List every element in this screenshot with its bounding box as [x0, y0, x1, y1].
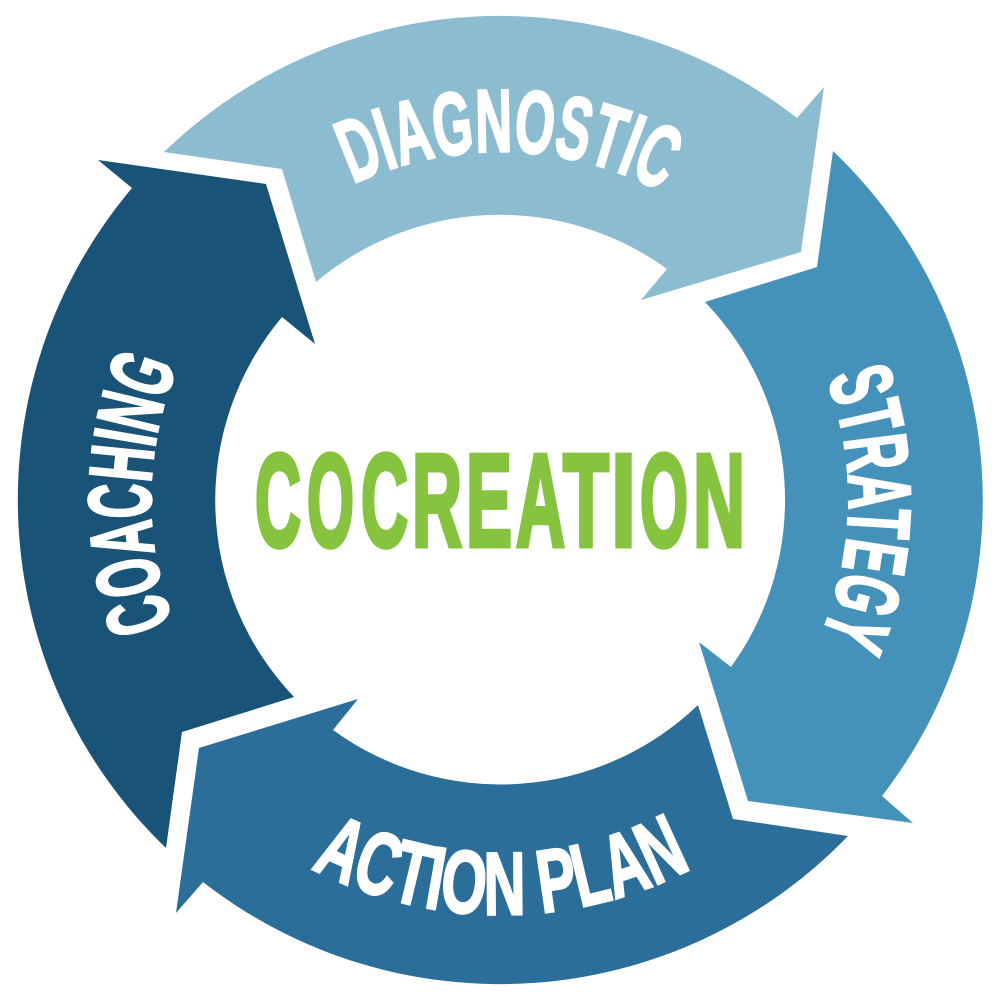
arrow: action plan: ACTION PLAN — [310, 813, 690, 916]
center title: O — [640, 427, 688, 574]
arrow: coaching — [18, 160, 315, 848]
arrow: diagnostic: DIAGNOSTIC — [332, 88, 682, 187]
center title: C — [255, 427, 301, 574]
center title: O — [307, 427, 354, 574]
center title: E — [466, 427, 512, 574]
center title: N — [693, 427, 745, 574]
center title — [255, 427, 745, 574]
center title: C — [361, 427, 408, 574]
center title: I — [611, 427, 636, 574]
arrow: action plan — [176, 699, 848, 984]
arrow: diagnostic — [164, 16, 824, 300]
center title: R — [412, 427, 462, 574]
center title: A — [516, 427, 565, 574]
arrow: coaching: COACHING — [87, 352, 174, 635]
arrow: strategy — [699, 151, 983, 823]
arrow: strategy: STRATEGY — [824, 364, 912, 660]
center title: T — [563, 427, 609, 574]
